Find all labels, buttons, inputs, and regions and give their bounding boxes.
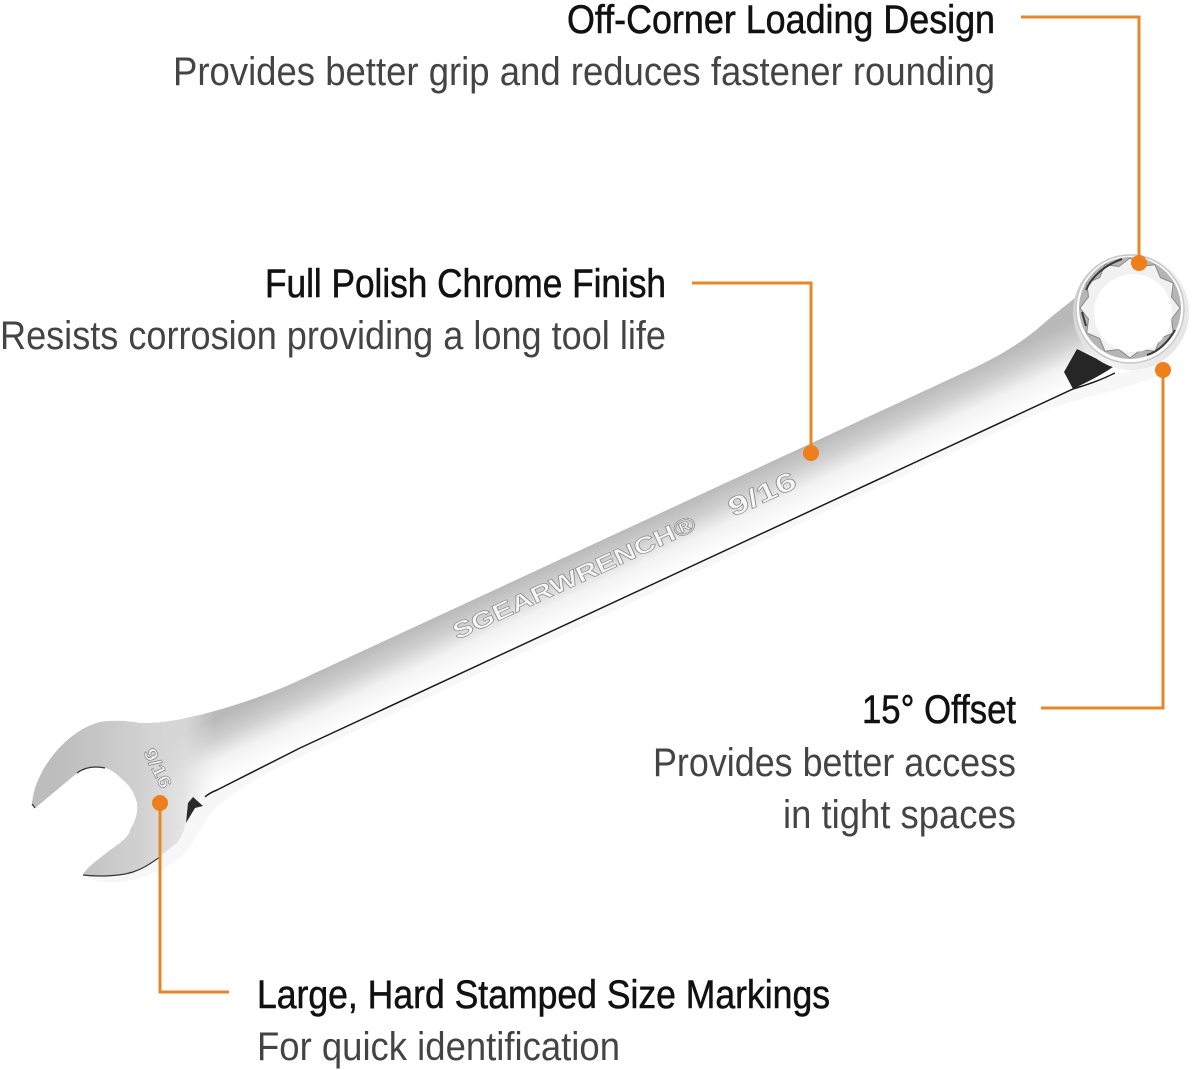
dark reflection near ring: [1064, 349, 1113, 389]
leader dot: [152, 795, 168, 811]
description line 2: in tight spaces: [783, 793, 1016, 837]
callout: full polish chrome finish: [0, 262, 819, 461]
ring head: [1073, 254, 1189, 370]
heading: Full Polish Chrome Finish: [265, 262, 666, 306]
leader line: [692, 283, 811, 453]
callout: large hard stamped size markings: [152, 795, 830, 1069]
ring inner dark glints: [1082, 259, 1175, 355]
jaw highlight edges: [32, 767, 160, 876]
description: Provides better grip and reduces fastener rounding: [173, 50, 995, 94]
heading: 15° Offset: [862, 688, 1016, 732]
leader dot: [1155, 362, 1171, 378]
description: Resists corrosion providing a long tool life: [0, 314, 666, 358]
wrench shank and open end base: [32, 298, 1120, 876]
wrench: [32, 254, 1189, 882]
leader line: [1041, 370, 1163, 708]
lower black edge line: [205, 373, 1115, 797]
logo stamp: SGEARWRENCH®: [448, 510, 700, 645]
open end jaw shading: [32, 712, 215, 876]
callout: 15 degree offset: [653, 362, 1171, 837]
description: For quick identification: [257, 1025, 620, 1069]
size stamp shank: 9/16: [723, 465, 801, 522]
ring teeth: [1080, 258, 1180, 358]
ring hole: [1094, 274, 1172, 352]
wrench lower bevel shadow: [83, 360, 1172, 882]
callout: off-corner loading design: [173, 0, 1147, 271]
dark reflection near open end: [186, 797, 203, 823]
leader dot: [1131, 255, 1147, 271]
heading: Large, Hard Stamped Size Markings: [257, 973, 830, 1017]
description line 1: Provides better access: [653, 741, 1016, 785]
leader dot: [803, 445, 819, 461]
leader line: [160, 803, 229, 992]
leader line: [1021, 17, 1139, 263]
size stamp jaw: 9/16: [139, 745, 176, 792]
